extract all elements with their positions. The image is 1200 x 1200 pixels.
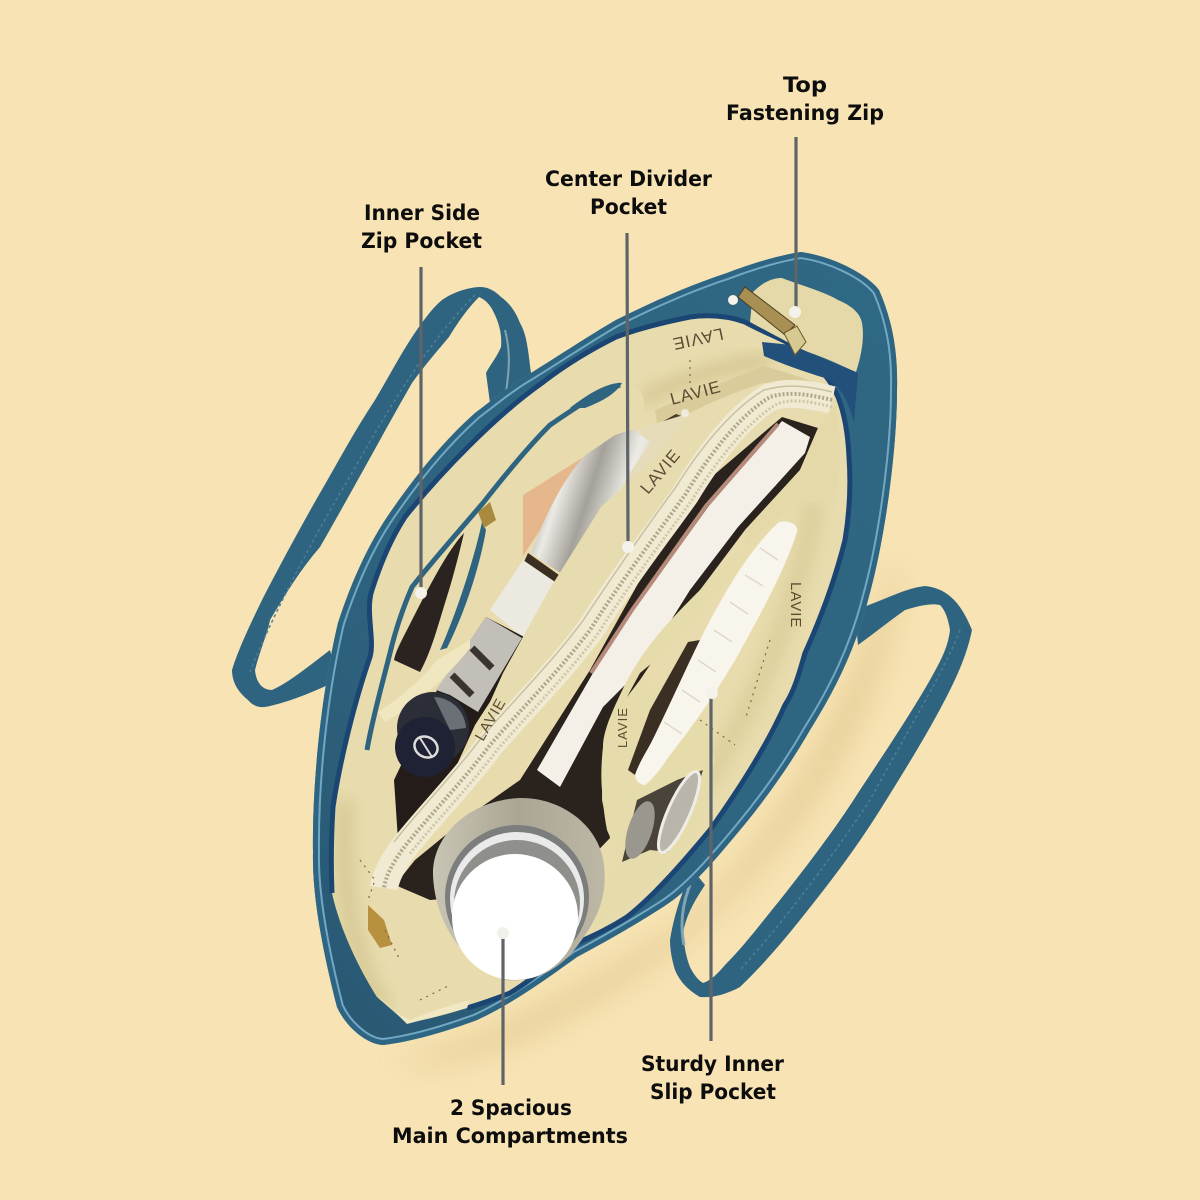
dark compartment	[394, 617, 530, 840]
lining bottom fold	[378, 995, 470, 1024]
pointer: main compartments	[497, 927, 509, 1085]
zip pull	[738, 287, 806, 355]
label: sturdy inner slip pocket: Sturdy Inner	[641, 1052, 785, 1076]
keys	[619, 767, 707, 862]
perfume cap	[395, 692, 469, 777]
lining print text: LAVIE	[472, 695, 510, 744]
water bottle	[433, 798, 605, 980]
side pocket zipper	[367, 385, 620, 750]
lining print text	[472, 324, 804, 748]
side pocket panel	[365, 383, 620, 750]
phone pocket	[394, 533, 464, 672]
blue pocket tab	[570, 383, 622, 408]
pointer: center divider pocket	[622, 233, 634, 553]
label: main compartments: 2 Spacious	[450, 1096, 572, 1120]
back panel fold	[655, 366, 820, 440]
bag body	[313, 252, 897, 1045]
label: center divider pocket	[545, 167, 713, 219]
lining print text: LAVIE	[637, 446, 684, 498]
right compartment dark area	[395, 417, 818, 900]
label: inner side zip pocket: Zip Pocket	[361, 229, 482, 253]
lining	[331, 316, 850, 1023]
marker dots	[681, 295, 738, 417]
dark gap at back	[653, 414, 698, 450]
label: sturdy inner slip pocket	[641, 1052, 785, 1104]
upper lining between side pocket and tin	[470, 384, 644, 635]
label: main compartments	[392, 1096, 628, 1148]
side pocket brass zip pull	[478, 502, 496, 528]
lining print text: LAVIE	[670, 324, 725, 353]
pointer: sturdy inner slip pocket	[706, 687, 718, 1041]
lining print specks	[360, 360, 770, 1000]
inner slip pocket	[593, 502, 800, 927]
label: inner side zip pocket: Inner Side	[364, 201, 480, 225]
lower side pocket edge	[378, 640, 470, 722]
metal tin	[531, 430, 650, 578]
photo item	[436, 617, 522, 712]
lining behind tin	[566, 413, 690, 580]
spiral notepad	[635, 522, 797, 785]
bag illustration	[232, 252, 972, 1064]
shade beside notepad	[628, 640, 700, 775]
pointer: top fastening zip	[789, 137, 801, 318]
label: inner side zip pocket	[361, 201, 482, 253]
left handle	[232, 287, 531, 707]
tin shadow	[524, 553, 566, 590]
opening zipper	[331, 316, 850, 1008]
lining shading	[344, 360, 815, 1010]
peach reflection	[523, 453, 590, 556]
right handle	[670, 586, 972, 997]
label: main compartments: Main Compartments	[392, 1124, 628, 1148]
pocket flap blue	[440, 522, 486, 650]
white box	[490, 560, 561, 640]
label: sturdy inner slip pocket: Slip Pocket	[650, 1080, 776, 1104]
lining print text: LAVIE	[668, 377, 723, 409]
book	[537, 421, 810, 787]
center divider pocket	[377, 383, 834, 930]
lining right of book	[745, 405, 840, 545]
bottom brass zip end	[368, 905, 392, 948]
lining print text: LAVIE	[615, 707, 630, 748]
label: top fastening zip	[726, 73, 884, 125]
lining print text: LAVIE	[787, 582, 804, 628]
label: center divider pocket: Center Divider	[545, 167, 713, 191]
body light edge	[313, 252, 897, 1045]
top pocket	[750, 278, 863, 372]
pointer: inner side zip pocket	[415, 267, 427, 599]
label: top fastening zip: Top	[783, 73, 827, 97]
label: center divider pocket: Pocket	[590, 195, 667, 219]
label: top fastening zip: Fastening Zip	[726, 101, 884, 125]
blue zip tape	[762, 342, 858, 422]
